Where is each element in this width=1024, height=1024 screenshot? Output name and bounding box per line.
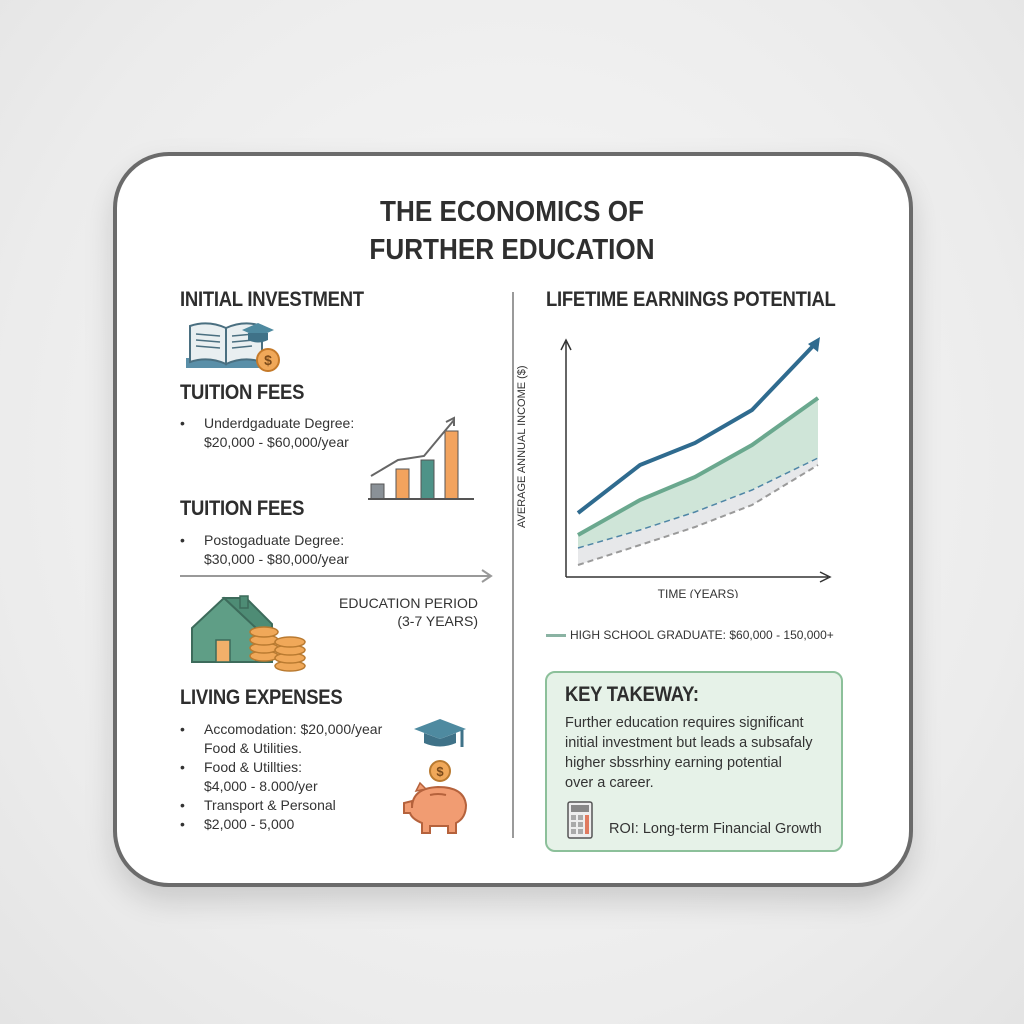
text: living expenses list: Transport & Personal <box>204 797 336 813</box>
text: living expenses list: • <box>180 816 185 832</box>
legend: HIGH SCHOOL GRADUATE: $60,000 - 150,000+ <box>570 628 834 642</box>
text: takeaway: initial investment but leads a subsafaly <box>565 735 812 751</box>
text: living expenses list: Food & Utilities. <box>204 740 302 756</box>
text: living expenses list: • <box>180 759 185 775</box>
divider <box>512 292 514 838</box>
icon: house with coins <box>191 595 306 672</box>
text: undergraduate: • <box>180 415 185 431</box>
text: education period <box>339 595 478 629</box>
text: living expenses list: Food & Utillties: <box>204 759 302 775</box>
heading: living expenses: LIVING EXPENSES <box>180 686 342 709</box>
heading: key takeaway: KEY TAKEWAY: <box>565 683 699 706</box>
text: living expenses list <box>180 721 382 832</box>
text: undergraduate: Underdgaduate Degree: <box>204 415 354 431</box>
text: ROI: ROI: Long-term Financial Growth <box>609 821 822 837</box>
text: postgraduate <box>180 532 349 567</box>
text: education period: EDUCATION PERIOD <box>339 595 478 611</box>
heading: initial investment: INITIAL INVESTMENT <box>180 288 364 311</box>
text: living expenses list: Accomodation: $20,000/year <box>204 721 382 737</box>
title: THE ECONOMICS OF <box>380 196 644 228</box>
line chart <box>516 337 832 598</box>
arrow: education period <box>180 569 493 583</box>
line chart: AVERAGE ANNUAL INCOME ($) <box>516 365 528 528</box>
panel: initial investment <box>180 288 493 834</box>
text: living expenses list: $4,000 - 8.000/yer <box>204 778 318 794</box>
text: postgraduate: • <box>180 532 185 548</box>
text: takeaway: over a career. <box>565 775 654 791</box>
text: living expenses list: • <box>180 797 185 813</box>
text: postgraduate: Postogaduate Degree: <box>204 532 344 548</box>
text: postgraduate: $30,000 - $80,000/year <box>204 551 349 567</box>
heading: tuition fees 2: TUITION FEES <box>180 497 304 520</box>
text: education period: (3-7 YEARS) <box>397 613 478 629</box>
callout: key takeaway <box>545 671 843 852</box>
title: FURTHER EDUCATION <box>369 234 655 266</box>
text: takeaway: higher sbssrhiny earning potential <box>565 755 782 771</box>
card <box>113 152 913 887</box>
text: living expenses list: • <box>180 721 185 737</box>
heading: lifetime earnings: LIFETIME EARNINGS POTENTIAL <box>546 288 836 311</box>
title <box>369 196 655 266</box>
icon: cap coin piggy bank <box>403 719 467 834</box>
text: takeaway <box>565 715 812 791</box>
icon: calculator <box>567 801 593 839</box>
icon: book with cap and coin <box>186 322 280 372</box>
icon: bar chart growth <box>368 416 474 500</box>
text: undergraduate <box>180 415 354 450</box>
text: living expenses list: $2,000 - 5,000 <box>204 816 294 832</box>
icon: cap coin piggy bank: $ <box>436 764 444 779</box>
heading: tuition fees 1: TUITION FEES <box>180 381 304 404</box>
text: undergraduate: $20,000 - $60,000/year <box>204 434 349 450</box>
icon: book with cap and coin: $ <box>264 352 272 368</box>
text: takeaway: Further education requires significant <box>565 715 804 731</box>
panel: lifetime earnings <box>516 288 836 642</box>
